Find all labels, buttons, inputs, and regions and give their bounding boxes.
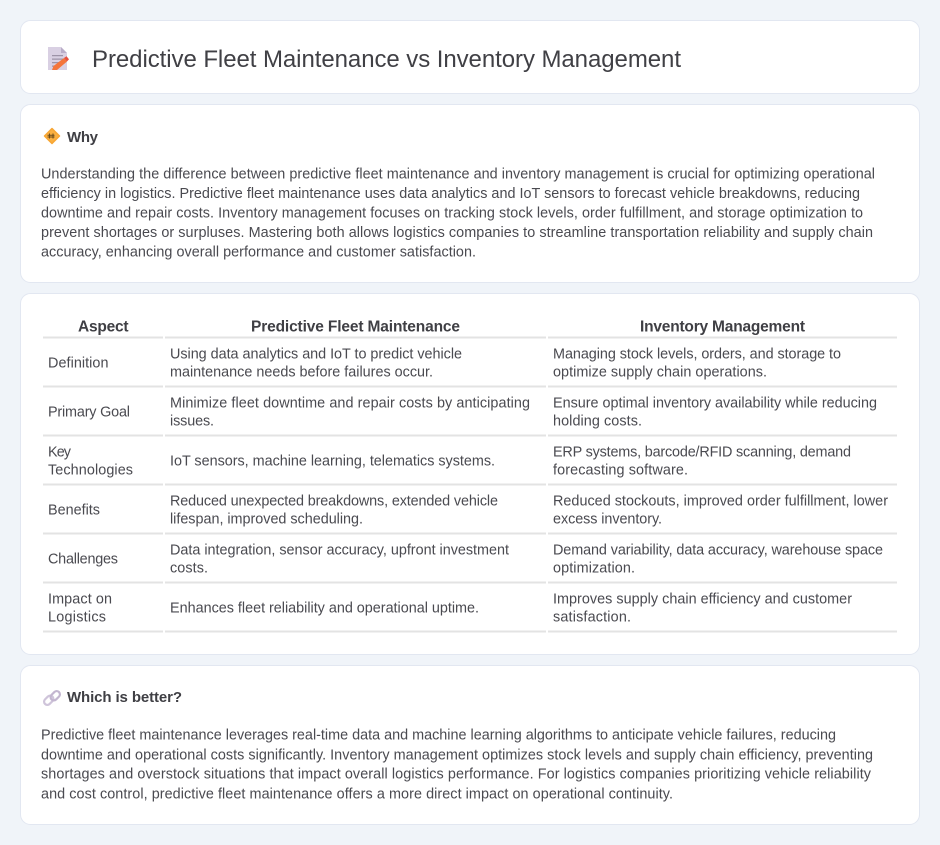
icon: memo with pencil [48, 47, 69, 70]
row: primary goal: Primary Goal [48, 404, 130, 420]
why body text [41, 166, 875, 260]
which is better body text: Predictive fleet maintenance leverages real-time data and machine learning algorithms to anticipate vehicle failures, reducing [41, 728, 836, 744]
row: impact on logistics: Logistics [48, 610, 106, 626]
row: key technologies [43, 444, 897, 486]
why body text: Understanding the difference between predictive fleet maintenance and inventory management is crucial for optimizing operational [41, 166, 875, 182]
why body text: efficiency in logistics. Predictive fleet maintenance uses data analytics and IoT sensors to forecast vehicle breakdowns, reducing [41, 186, 860, 202]
row: challenges: Demand variability, data accuracy, warehouse space [553, 542, 883, 558]
row: challenges: Challenges [48, 552, 118, 568]
table header row: Inventory Management [640, 318, 805, 336]
heading: why: Why [67, 129, 99, 146]
row: benefits: Reduced stockouts, improved order fulfillment, lower [553, 494, 888, 510]
panel: which is better [20, 666, 920, 824]
row: key technologies: Key [48, 444, 72, 460]
why body text: accuracy, enhancing overall performance and customer satisfaction. [41, 244, 476, 260]
row: benefits [43, 494, 897, 534]
row: impact on logistics: Enhances fleet reliability and operational uptime. [170, 600, 479, 616]
row: primary goal: Ensure optimal inventory availability while reducing [553, 396, 877, 412]
panel: comparison table [20, 294, 920, 654]
which is better body text: downtime and operational costs significantly. Inventory management optimizes stock levels and supply chain efficiency, preventing [41, 748, 873, 764]
heading: which is better: Which is better? [67, 689, 182, 706]
row: impact on logistics: satisfaction. [553, 610, 631, 626]
title: Predictive Fleet Maintenance vs Inventory Management [92, 46, 681, 73]
table header row [43, 318, 897, 338]
row: key technologies: Technologies [48, 462, 133, 478]
row: challenges: optimization. [553, 560, 635, 576]
row: definition: Managing stock levels, orders, and storage to [553, 346, 841, 362]
row: key technologies: IoT sensors, machine learning, telematics systems. [170, 454, 495, 470]
row: impact on logistics [43, 592, 897, 632]
row: definition: Definition [48, 356, 108, 372]
row: definition [43, 346, 897, 388]
icon: link [43, 690, 61, 706]
icon: warning diamond [44, 128, 60, 144]
which is better body text: shortages and overstock situations that impact overall logistics performance. For logistics companies prioritizing vehicle reliability [41, 766, 872, 782]
row: definition: optimize supply chain operations. [553, 364, 767, 380]
row: key technologies: forecasting software. [553, 462, 688, 478]
table header row: Predictive Fleet Maintenance [251, 318, 460, 336]
row: definition: Using data analytics and IoT to predict vehicle [170, 346, 462, 362]
table header row: Aspect [78, 318, 128, 336]
why body text: prevent shortages or surpluses. Mastering both allows logistics companies to streamline transportation reliability and supply chain [41, 225, 873, 241]
row: definition: maintenance needs before failures occur. [170, 364, 433, 380]
why body text: downtime and repair costs. Inventory management focuses on tracking stock levels, order fulfillment, and storage optimization to [41, 206, 863, 222]
row: challenges [43, 542, 897, 584]
row: impact on logistics: Improves supply chain efficiency and customer [553, 592, 852, 608]
row: challenges: Data integration, sensor accuracy, upfront investment [170, 542, 509, 558]
row: primary goal: Minimize fleet downtime and repair costs by anticipating [170, 396, 530, 412]
row: benefits: excess inventory. [553, 512, 662, 528]
which is better body text: and cost control, predictive fleet maintenance offers a more direct impact on operational continuity. [41, 786, 673, 802]
row: primary goal: holding costs. [553, 414, 642, 430]
row: primary goal: issues. [170, 414, 214, 430]
row: impact on logistics: Impact on [48, 592, 112, 608]
row: benefits: Reduced unexpected breakdowns, extended vehicle [170, 494, 498, 510]
row: primary goal [43, 396, 897, 436]
panel: why [20, 104, 920, 282]
row: benefits: Benefits [48, 502, 100, 518]
header panel [20, 20, 920, 94]
which is better body text [41, 728, 873, 802]
row: key technologies: ERP systems, barcode/RFID scanning, demand [553, 444, 851, 460]
row: challenges: costs. [170, 560, 208, 576]
row: benefits: lifespan, improved scheduling. [170, 512, 363, 528]
